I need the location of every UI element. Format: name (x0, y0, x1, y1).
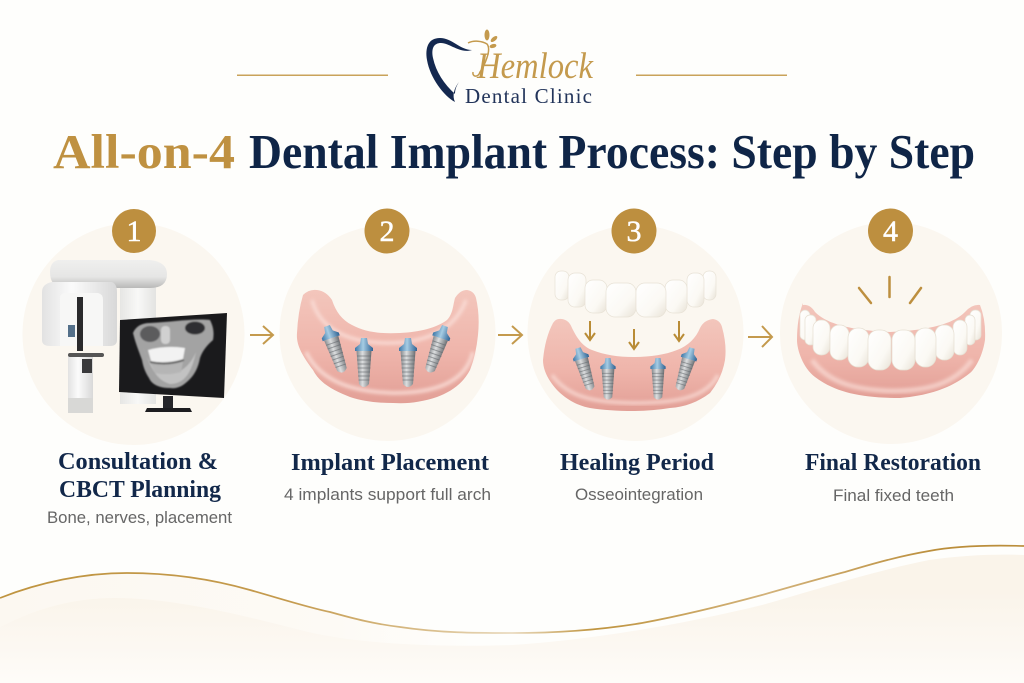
step 4: final restoration panel (780, 222, 1002, 444)
step 2 label (284, 450, 491, 504)
header rule left (237, 74, 388, 76)
step 2: implant placement panel (280, 225, 496, 441)
arrow 2 to 3 (498, 326, 522, 344)
icon: full arch of teeth on gums (797, 303, 985, 398)
icon: CBCT scanner (42, 260, 167, 413)
step 1 label: CBCT Planning (59, 477, 221, 503)
step 4 badge: 4 (883, 215, 898, 248)
step 2 badge: 2 (380, 215, 394, 248)
step 3 label: Healing Period (560, 450, 715, 476)
bottom wave decoration (0, 546, 1024, 683)
panel circle 3 (528, 225, 744, 441)
step 1 badge: 1 (126, 215, 142, 248)
step 3 badge: 3 (626, 215, 642, 248)
step 4 label: Final Restoration (805, 450, 981, 476)
icon: gum arch with four implants (297, 290, 479, 403)
step 1 label: Consultation & (58, 449, 218, 475)
step 4 label: Final fixed teeth (833, 486, 954, 505)
step 3: healing period panel (528, 225, 744, 441)
Dental Clinic wordmark: Dental Clinic (465, 84, 592, 108)
icon: gold leaves and swash (468, 30, 498, 76)
step 4 badge (868, 208, 913, 254)
logo: Hemlock Dental Clinic (426, 30, 593, 108)
step 2 label: Implant Placement (291, 450, 489, 476)
step 4 label (805, 450, 981, 505)
step 3 badge (612, 208, 656, 254)
title: All-on-4 (53, 124, 235, 179)
step 1 badge (112, 209, 156, 253)
Hemlock wordmark: Hemlock (476, 46, 593, 87)
panel circle 4 (780, 222, 1002, 444)
arrow 1 to 2 (250, 326, 273, 344)
header rule right (636, 74, 787, 76)
panel circle 2 (280, 225, 496, 441)
icon: floating bridge of teeth (555, 271, 716, 317)
step 3 label: Osseointegration (575, 485, 703, 504)
icon: gum arch with four implants (543, 319, 726, 411)
title: Dental Implant Process: Step by Step (249, 124, 975, 179)
icon: monitor with skull x-ray (119, 313, 227, 412)
step 1: consultation panel (22, 223, 244, 445)
step 2 label: 4 implants support full arch (284, 485, 491, 504)
icon: shine lines (859, 277, 921, 303)
panel circle 1 (22, 223, 244, 445)
icon: tooth outline (426, 38, 472, 102)
step 1 label: Bone, nerves, placement (47, 508, 232, 527)
step 3 label (560, 450, 715, 504)
step 1 label (47, 449, 232, 527)
step 2 badge (364, 208, 410, 254)
arrow 3 to 4 (748, 326, 772, 347)
icon: three downward arrows (585, 321, 684, 349)
